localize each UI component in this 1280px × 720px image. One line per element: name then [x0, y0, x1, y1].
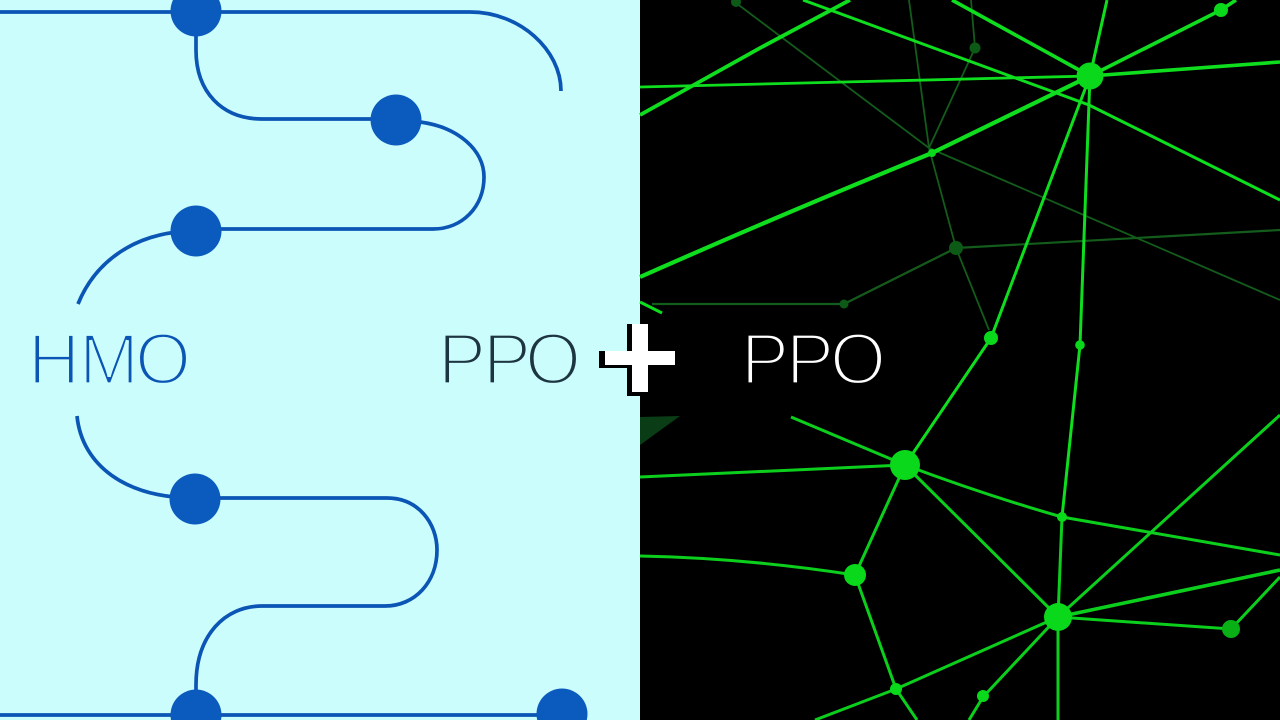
dark green wedge [640, 416, 680, 445]
panel: HMO network on pale blue [0, 0, 640, 720]
bright network nodes [844, 3, 1240, 702]
panel: PPO network on black [640, 0, 1280, 720]
bright lower network lines [640, 415, 1280, 720]
lower blue route line [0, 416, 562, 715]
label: PPO white: PPO [741, 320, 886, 400]
label: HMO: HMO [28, 320, 191, 400]
dim background network lines [652, 0, 1280, 330]
icon: plus sign [599, 324, 675, 396]
label: PPO dark: PPO [438, 320, 581, 400]
upper blue route line [0, 12, 561, 304]
bright upper network lines [640, 0, 1280, 517]
blue network nodes [170, 0, 588, 720]
dim network nodes [731, 0, 980, 308]
